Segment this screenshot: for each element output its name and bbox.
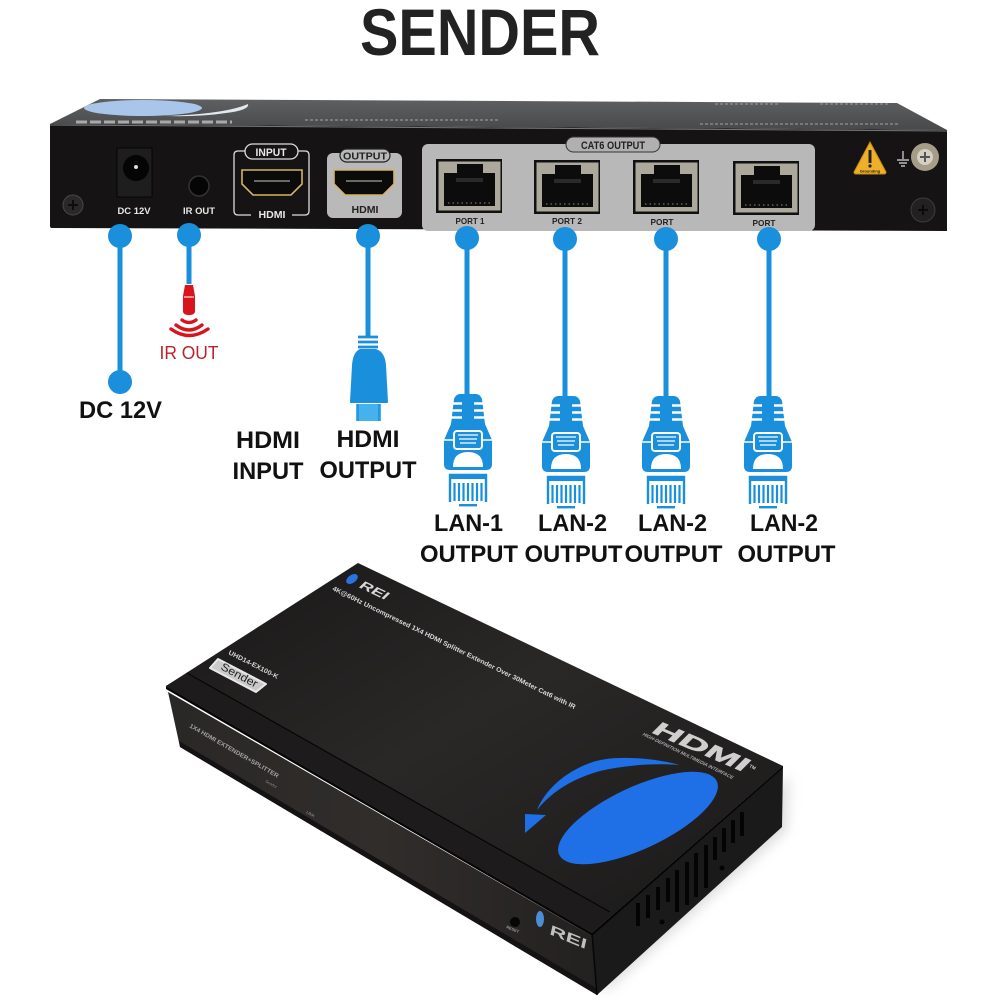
icon: grounding warning: Grounding bbox=[860, 168, 881, 174]
connector: IR line bbox=[177, 223, 201, 284]
IR OUT jack: IR OUT bbox=[183, 206, 216, 216]
logo: ORei on top: REI bbox=[356, 579, 393, 602]
port 3 bbox=[633, 160, 699, 227]
icon: grounding warning bbox=[854, 142, 886, 174]
label: LAN-2 output third: OUTPUT bbox=[738, 541, 836, 568]
connector: LAN-2 third bbox=[742, 227, 794, 508]
logo: ORei on front: REI bbox=[548, 923, 588, 953]
top description text: 4K@60Hz Uncompressed 1X4 HDMI Splitter Extender Over 30Meter Cat6 with IR bbox=[331, 586, 577, 711]
connector: LAN-2 first bbox=[540, 227, 592, 508]
IR OUT jack bbox=[183, 176, 216, 216]
label: LAN-2 output first: LAN-2 bbox=[538, 510, 607, 537]
vents bbox=[638, 812, 742, 926]
screw right bbox=[911, 198, 935, 222]
port 4: PORT bbox=[752, 218, 776, 228]
HDMI output port: HDMI bbox=[352, 205, 379, 216]
connector: DC 12V line bbox=[108, 224, 132, 394]
DC 12V jack bbox=[117, 148, 152, 216]
HDMI input port: HDMI bbox=[258, 210, 286, 221]
device top face bbox=[50, 99, 947, 130]
port 1: PORT 1 bbox=[456, 216, 485, 226]
logo: HDMI bbox=[641, 718, 757, 781]
port 2: PORT 2 bbox=[552, 216, 582, 226]
front panel text: 1X4 HDMI EXTENDER+SPLITTER bbox=[188, 724, 280, 780]
label: HDMI output: OUTPUT bbox=[320, 457, 417, 484]
Sender label: Sender bbox=[219, 661, 260, 691]
connector: LAN-1 bbox=[442, 226, 494, 506]
label: LAN-1 output: LAN-1 bbox=[434, 510, 503, 537]
label: LAN-1 output bbox=[420, 510, 518, 568]
port 1 bbox=[436, 159, 502, 226]
front panel text bbox=[188, 724, 316, 818]
label: LAN-2 output first bbox=[524, 510, 623, 568]
CAT6 output panel: CAT6 OUTPUT bbox=[581, 140, 645, 152]
connector: HDMI output line bbox=[356, 224, 380, 337]
reset button bbox=[506, 917, 520, 934]
logo: blue ellipse and swoosh arrow bbox=[525, 753, 730, 883]
port 3: PORT bbox=[650, 217, 674, 227]
label: HDMI input bbox=[232, 427, 304, 485]
icon: IR emitter bbox=[171, 285, 208, 336]
front bezel strip bbox=[166, 673, 610, 933]
port 4 bbox=[733, 161, 799, 228]
CAT6 output panel bbox=[422, 137, 815, 231]
HDMI output port bbox=[327, 149, 402, 218]
device top face bbox=[166, 563, 783, 933]
screw left bbox=[63, 195, 83, 215]
label: DC 12V: DC 12V bbox=[79, 397, 162, 424]
label: LAN-2 output third: LAN-2 bbox=[750, 510, 818, 537]
ground screw bbox=[911, 143, 939, 171]
HDMI input port bbox=[234, 144, 309, 221]
label: LAN-2 output second bbox=[624, 510, 723, 568]
icon: ground symbol bbox=[897, 151, 909, 166]
front panel text: Sender bbox=[264, 779, 279, 790]
Sender label bbox=[210, 659, 266, 692]
front panel text: LINK bbox=[306, 810, 316, 818]
logo: HDMI: HDMI bbox=[646, 718, 757, 775]
DC 12V jack: DC 12V bbox=[118, 206, 150, 216]
HDMI output port: OUTPUT bbox=[343, 150, 388, 162]
logo: ORei on top bbox=[344, 572, 393, 602]
label: HDMI output: HDMI bbox=[336, 426, 400, 453]
label: HDMI input: INPUT bbox=[232, 458, 304, 485]
logo: HDMI: HIGH-DEFINITION MULTIMEDIA INTERFACE bbox=[641, 732, 735, 781]
device front side bbox=[168, 692, 597, 995]
logo: HDMI: TM bbox=[749, 763, 757, 771]
label: IR OUT: IR OUT bbox=[160, 343, 219, 363]
label: LAN-2 output second: LAN-2 bbox=[638, 510, 707, 537]
label: LAN-2 output third bbox=[738, 510, 836, 568]
label: HDMI input: HDMI bbox=[236, 427, 300, 454]
icon: HDMI plug bbox=[350, 337, 388, 421]
vent dots bbox=[660, 866, 724, 924]
device right side bbox=[592, 766, 783, 995]
front bottom band bbox=[179, 741, 597, 995]
reset button: RESET bbox=[506, 924, 520, 934]
model number: UHD14-EX100-K bbox=[227, 650, 279, 681]
device front face bbox=[50, 124, 947, 231]
label: LAN-1 output: OUTPUT bbox=[420, 541, 518, 568]
panel: sender device product photo bbox=[166, 563, 789, 995]
label: LAN-2 output first: OUTPUT bbox=[524, 541, 623, 568]
port 2 bbox=[534, 160, 600, 226]
logo: ORei on front bbox=[536, 911, 588, 953]
label: HDMI output bbox=[320, 426, 417, 484]
panel: rear view of sender device bbox=[50, 99, 947, 231]
label: LAN-2 output second: OUTPUT bbox=[624, 541, 723, 568]
HDMI input port: INPUT bbox=[256, 147, 287, 159]
connector: LAN-2 second bbox=[640, 227, 692, 508]
